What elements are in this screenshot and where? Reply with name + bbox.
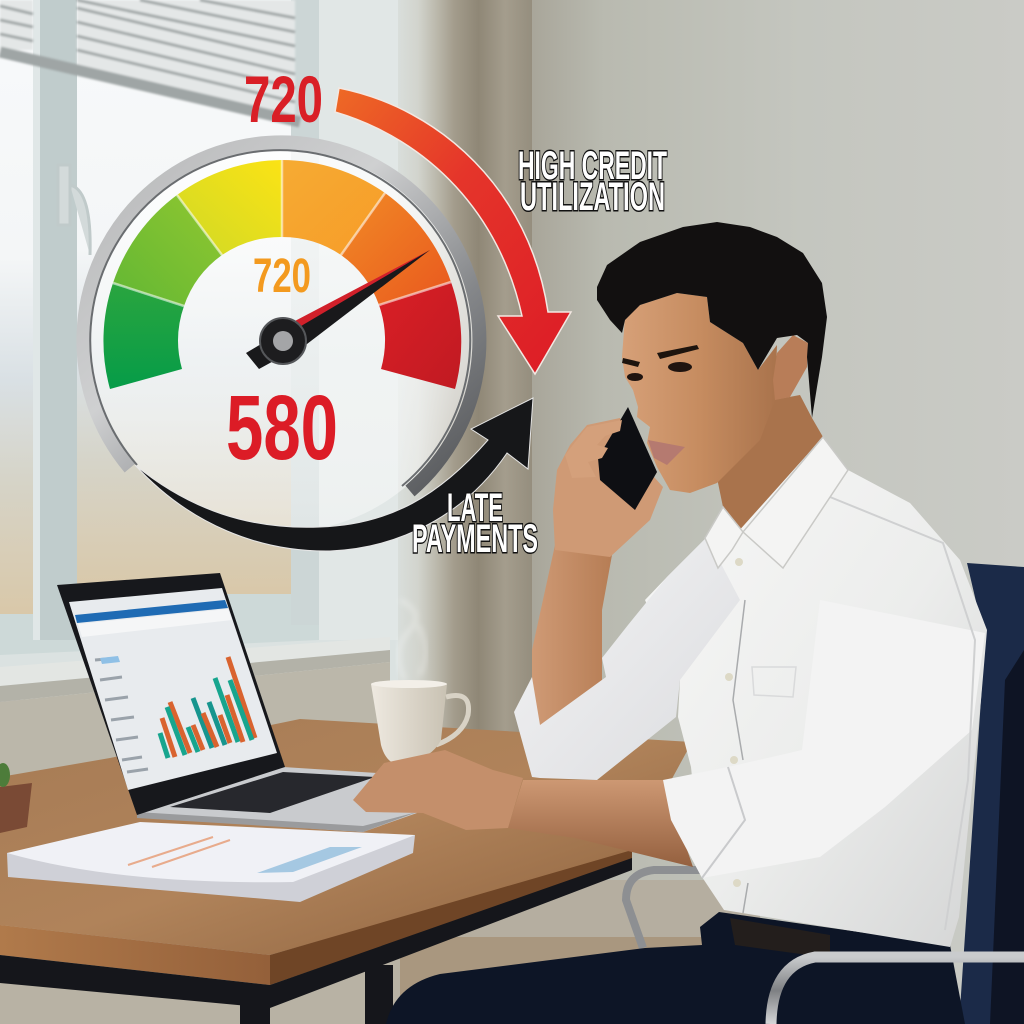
- steam: [399, 600, 426, 680]
- window blinds: [0, 0, 300, 122]
- gauge metal ring: [83, 142, 479, 491]
- plant pot: [0, 763, 32, 833]
- neck: [717, 395, 823, 533]
- window handle: [58, 165, 90, 255]
- phone: [598, 407, 657, 510]
- dial red segment: [379, 282, 461, 389]
- eyes and brows: [622, 345, 699, 465]
- display header bar: [75, 600, 228, 623]
- raised forearm: [532, 545, 612, 728]
- laptop base: [137, 767, 417, 832]
- needle: [246, 250, 430, 369]
- chair shadow side: [990, 650, 1024, 1024]
- gauge big score 580: 580: [226, 377, 338, 479]
- curtain: [398, 0, 532, 945]
- dial green segment: [103, 283, 184, 389]
- bar chart on screen: [160, 657, 255, 758]
- shirt torso: [645, 437, 987, 947]
- hand holding phone: [553, 418, 663, 557]
- lower wall left: [0, 770, 400, 1024]
- dial yellow segment: [177, 160, 282, 255]
- shoulder seam: [830, 497, 975, 930]
- desk: [0, 719, 692, 1024]
- dial amber segment: [282, 160, 385, 255]
- shirt collar: [705, 437, 848, 568]
- person: [353, 222, 987, 958]
- laptop: [57, 573, 417, 832]
- laptop display: [69, 588, 277, 790]
- sleeve cuff shadow: [702, 767, 745, 878]
- dial separators: [113, 160, 451, 306]
- shirt pocket: [752, 667, 796, 697]
- hair: [597, 222, 827, 418]
- shirt buttons: [725, 558, 743, 887]
- gauge centre score 720: 720: [253, 250, 311, 303]
- ear: [773, 335, 808, 400]
- laptop screen bezel: [57, 573, 285, 815]
- laptop front edge: [137, 812, 417, 832]
- gauge face: [90, 148, 474, 532]
- chrome chair arm right: [771, 957, 1024, 1024]
- raised arm sleeve: [514, 537, 740, 780]
- fingers: [565, 420, 622, 478]
- chair back: [959, 563, 1024, 1024]
- label: high credit utilization: HIGH CREDIT: [518, 144, 667, 188]
- coffee mug: [371, 680, 469, 764]
- chrome chair arm left: [626, 870, 700, 948]
- face: [622, 293, 777, 493]
- resting forearm: [508, 780, 693, 867]
- shirt placket: [733, 600, 748, 913]
- dial light green segment: [113, 195, 222, 306]
- hand on laptop: [353, 750, 523, 830]
- selected cell: [100, 656, 120, 664]
- red down arrow: [335, 88, 571, 374]
- trousers: [386, 912, 965, 1024]
- room below desk: [400, 880, 760, 945]
- gauge: face, dial, needle and scores: [83, 142, 479, 532]
- window: [0, 0, 405, 780]
- label: late payments: PAYMENTS: [412, 517, 538, 561]
- wall background: [530, 0, 1024, 1024]
- belt: [730, 918, 830, 958]
- black up arrow swoosh: [135, 398, 533, 551]
- display toolbar: [78, 609, 232, 637]
- lower sleeve: [663, 600, 985, 878]
- label: late payments: [412, 486, 538, 561]
- label: late payments: LATE: [447, 486, 503, 530]
- window sill: [0, 637, 390, 686]
- top score 720: 720: [244, 62, 323, 136]
- floor: [400, 937, 760, 1024]
- spreadsheet rows: [95, 658, 148, 772]
- dial orange segment: [341, 193, 451, 305]
- label: high credit utilization: [518, 144, 667, 219]
- stack of documents: [7, 822, 415, 902]
- keyboard: [170, 772, 375, 813]
- label: high credit utilization: UTILIZATION: [520, 175, 665, 219]
